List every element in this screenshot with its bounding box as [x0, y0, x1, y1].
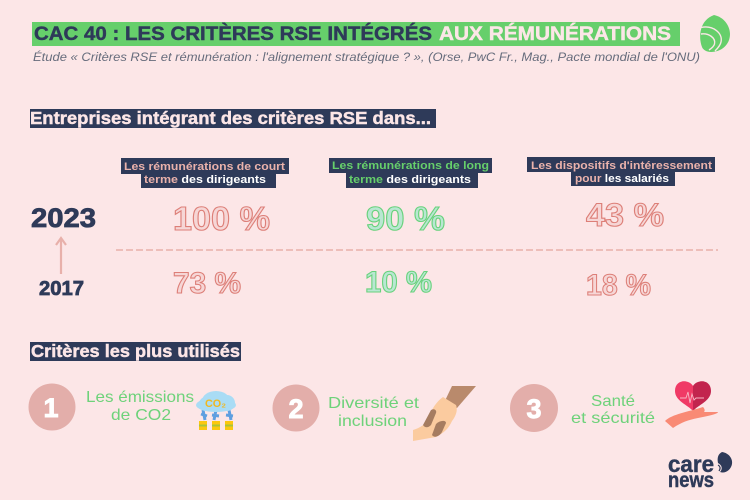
criterion 3 text: et sécurité [571, 410, 655, 427]
icon: helping hands [413, 386, 476, 441]
title: CAC 40 : LES CRITÈRES RSE INTÉGRÉS [34, 22, 432, 45]
logo: care news [668, 451, 732, 492]
badge 1: 1 [43, 393, 59, 423]
icon: heart in hand [665, 381, 718, 428]
criterion 2 text: inclusion [338, 413, 407, 430]
column header: court terme: Les rémunérations de court [124, 161, 285, 173]
column header: salariés: pour les salariés [575, 173, 669, 185]
icon: logo mark green [700, 15, 730, 52]
year 2017: 2017 [39, 277, 84, 300]
criterion 3 text: Santé [591, 393, 635, 410]
icon: CO2 cloud [196, 391, 236, 430]
column header: salariés [527, 157, 715, 186]
badge 3 [510, 384, 558, 432]
criterion 3 text [571, 393, 655, 427]
value: 10 % 2017: 10 % [365, 266, 432, 299]
value: 90 % 2023: 90 % [366, 200, 445, 237]
criterion 1 text [86, 389, 194, 424]
logo: care news: news [668, 469, 714, 492]
value: 18 % 2017: 18 % [586, 269, 651, 302]
logo: care news: care [668, 451, 714, 477]
heading: entreprises: Entreprises intégrant des critères RSE dans... [30, 108, 431, 128]
year 2023: 2023 [31, 203, 96, 233]
column header: long terme: terme des dirigeants [349, 174, 471, 186]
column header: court terme [121, 158, 289, 188]
badge 2 [272, 384, 320, 432]
value: 100 % 2023: 100 % [173, 200, 270, 237]
column header: salariés: Les dispositifs d'intéressement [531, 160, 712, 172]
value: 43 % 2023: 43 % [586, 197, 664, 233]
criterion 1 text: de CO2 [111, 407, 171, 424]
badge 1 [28, 384, 76, 430]
criterion 2 text: Diversité et [328, 395, 420, 412]
column header: long terme [329, 158, 492, 188]
column header: court terme: terme des dirigeants [144, 174, 266, 186]
subtitle: source: Étude « Critères RSE et rémunération : l'alignement stratégique ? », (Orse, PwC Fr., Mag., Pacte mondial de l'ONU) [33, 51, 700, 64]
value: 73 % 2017: 73 % [173, 267, 241, 300]
icon: CO2 cloud: CO₂ [205, 398, 226, 410]
badge 2: 2 [288, 394, 304, 424]
column header: long terme: Les rémunérations de long [332, 160, 489, 172]
criterion 1 text: Les émissions [86, 389, 194, 406]
title: AUX RÉMUNÉRATIONS [439, 22, 671, 45]
arrow: 2017 to 2023 [56, 238, 66, 274]
heading: critères: Critères les plus utilisés [31, 341, 240, 361]
criterion 2 text [328, 395, 420, 430]
title [32, 22, 680, 46]
badge 3: 3 [526, 394, 542, 424]
